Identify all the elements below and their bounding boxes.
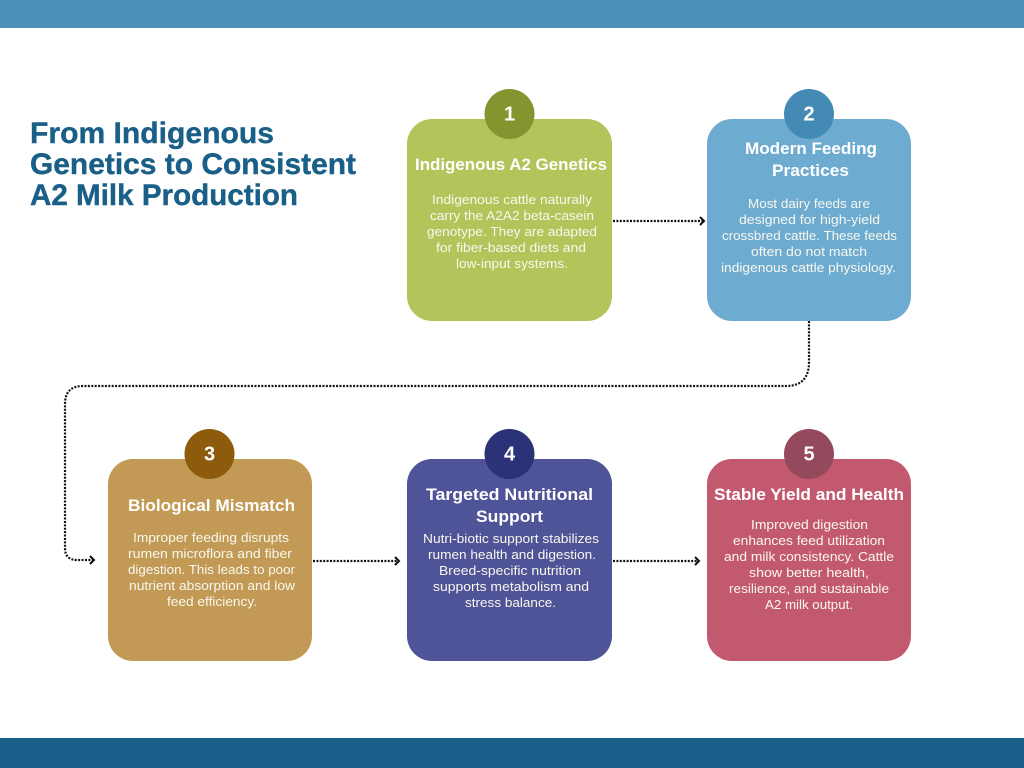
body text: crossbred cattle. These feeds bbox=[722, 229, 897, 243]
arrow: step 4 to step 5 bbox=[613, 557, 699, 565]
body text: carry the A2A2 beta-casein bbox=[430, 209, 594, 223]
number badge 3 bbox=[184, 429, 234, 479]
body text bbox=[721, 197, 897, 275]
heading: Modern Feeding bbox=[745, 139, 877, 158]
body text: show better health, bbox=[749, 566, 869, 580]
body text: Most dairy feeds are bbox=[748, 197, 870, 211]
body text: Indigenous cattle naturally bbox=[432, 193, 593, 207]
body text: resilience, and sustainable bbox=[729, 582, 889, 596]
body text: nutrient absorption and low bbox=[129, 579, 296, 593]
number badge 2: 2 bbox=[803, 104, 815, 126]
heading: Indigenous A2 Genetics bbox=[415, 155, 607, 174]
body text: Improper feeding disrupts bbox=[133, 531, 289, 545]
panel: step 2 Modern Feeding Practices bbox=[707, 89, 911, 321]
body text: low-input systems. bbox=[456, 257, 568, 271]
panel: step 4 Targeted Nutritional Support bbox=[407, 429, 612, 661]
arrow: step 1 to step 2 bbox=[613, 217, 704, 225]
body text: designed for high-yield bbox=[739, 213, 880, 227]
title bbox=[30, 117, 356, 212]
body text bbox=[423, 532, 599, 610]
body text: and milk consistency. Cattle bbox=[724, 550, 894, 564]
body text: often do not match bbox=[751, 245, 867, 259]
number badge 4 bbox=[484, 429, 534, 479]
arrow: step 3 to step 4 bbox=[313, 557, 399, 565]
heading: Stable Yield and Health bbox=[714, 485, 904, 504]
number badge 5 bbox=[784, 429, 834, 479]
title: From Indigenous bbox=[30, 117, 274, 150]
body text: genotype. They are adapted bbox=[427, 225, 597, 239]
body text: supports metabolism and bbox=[433, 580, 589, 594]
body text: Improved digestion bbox=[751, 518, 868, 532]
bottom banner bbox=[0, 738, 1024, 768]
body text bbox=[724, 518, 894, 612]
number badge 5: 5 bbox=[803, 444, 815, 466]
body text: indigenous cattle physiology. bbox=[721, 261, 896, 275]
heading: Practices bbox=[772, 161, 849, 180]
title: A2 Milk Production bbox=[30, 179, 298, 212]
panel: step 3 Biological Mismatch bbox=[108, 429, 312, 661]
title: Genetics to Consistent bbox=[30, 148, 356, 181]
number badge 1: 1 bbox=[504, 104, 515, 126]
heading: Biological Mismatch bbox=[128, 496, 295, 515]
body text: for fiber-based diets and bbox=[436, 241, 586, 255]
heading bbox=[426, 485, 593, 526]
heading: Targeted Nutritional bbox=[426, 485, 593, 504]
body text: stress balance. bbox=[465, 596, 556, 610]
heading bbox=[745, 139, 877, 180]
heading: Support bbox=[476, 507, 543, 526]
body text: A2 milk output. bbox=[765, 598, 853, 612]
number badge 3: 3 bbox=[204, 444, 215, 466]
body text: Breed-specific nutrition bbox=[439, 564, 581, 578]
number badge 2 bbox=[784, 89, 834, 139]
body text bbox=[427, 193, 597, 271]
top banner bbox=[0, 0, 1024, 28]
panel: step 1 Indigenous A2 Genetics bbox=[407, 89, 612, 321]
body text bbox=[128, 531, 296, 609]
body text: enhances feed utilization bbox=[733, 534, 885, 548]
body text: digestion. This leads to poor bbox=[128, 563, 295, 577]
number badge 4: 4 bbox=[504, 444, 516, 466]
number badge 1 bbox=[484, 89, 534, 139]
body text: rumen microflora and fiber bbox=[128, 547, 292, 561]
body text: rumen health and digestion. bbox=[428, 548, 596, 562]
panel: step 5 Stable Yield and Health bbox=[707, 429, 911, 661]
arrow: step 2 to step 3 bbox=[65, 321, 809, 564]
body text: feed efficiency. bbox=[167, 595, 257, 609]
body text: Nutri-biotic support stabilizes bbox=[423, 532, 599, 546]
